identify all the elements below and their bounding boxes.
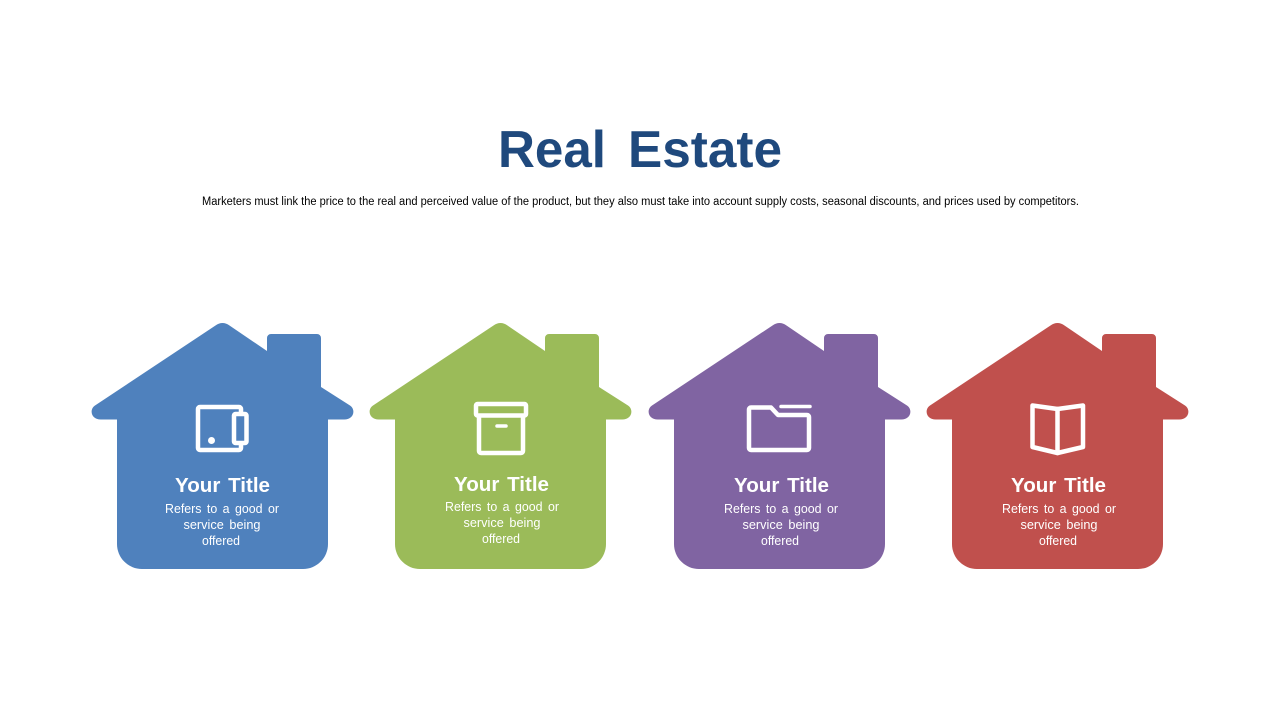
description: offered <box>202 534 240 548</box>
icon: folder <box>749 406 810 450</box>
description: offered <box>761 534 799 548</box>
description: offered <box>1039 534 1077 548</box>
description: Refers to a good or <box>1002 502 1116 516</box>
panel: red house <box>927 323 1188 569</box>
title: Real <box>498 121 606 179</box>
description: service being <box>184 518 261 532</box>
description: service being <box>464 516 541 530</box>
description: service being <box>742 518 820 532</box>
description: offered <box>482 532 520 546</box>
description: Refers to a good or <box>445 500 559 514</box>
heading: your title: Your Title <box>454 473 549 496</box>
description <box>724 502 838 548</box>
heading: your title: Your Title <box>175 474 270 497</box>
description <box>445 500 559 546</box>
icon: open book <box>1032 406 1083 453</box>
title <box>498 121 782 179</box>
icon: wallet <box>198 407 246 450</box>
description <box>165 502 279 548</box>
description: Refers to a good or <box>165 502 279 516</box>
panel: green house <box>370 323 631 569</box>
description: service being <box>1020 518 1098 532</box>
subtitle text: Marketers must link the price to the real and perceived value of the product, but they also must take into account supply costs, seasonal discounts, and prices used by competitors. <box>202 196 1079 208</box>
description <box>1002 502 1116 548</box>
title: Estate <box>628 121 782 179</box>
heading: your title: Your Title <box>734 474 829 497</box>
heading: your title: Your Title <box>1011 474 1106 497</box>
icon: storage box <box>476 404 526 453</box>
description: Refers to a good or <box>724 502 838 516</box>
panel: blue house <box>92 323 353 569</box>
panel: purple house <box>649 323 910 569</box>
